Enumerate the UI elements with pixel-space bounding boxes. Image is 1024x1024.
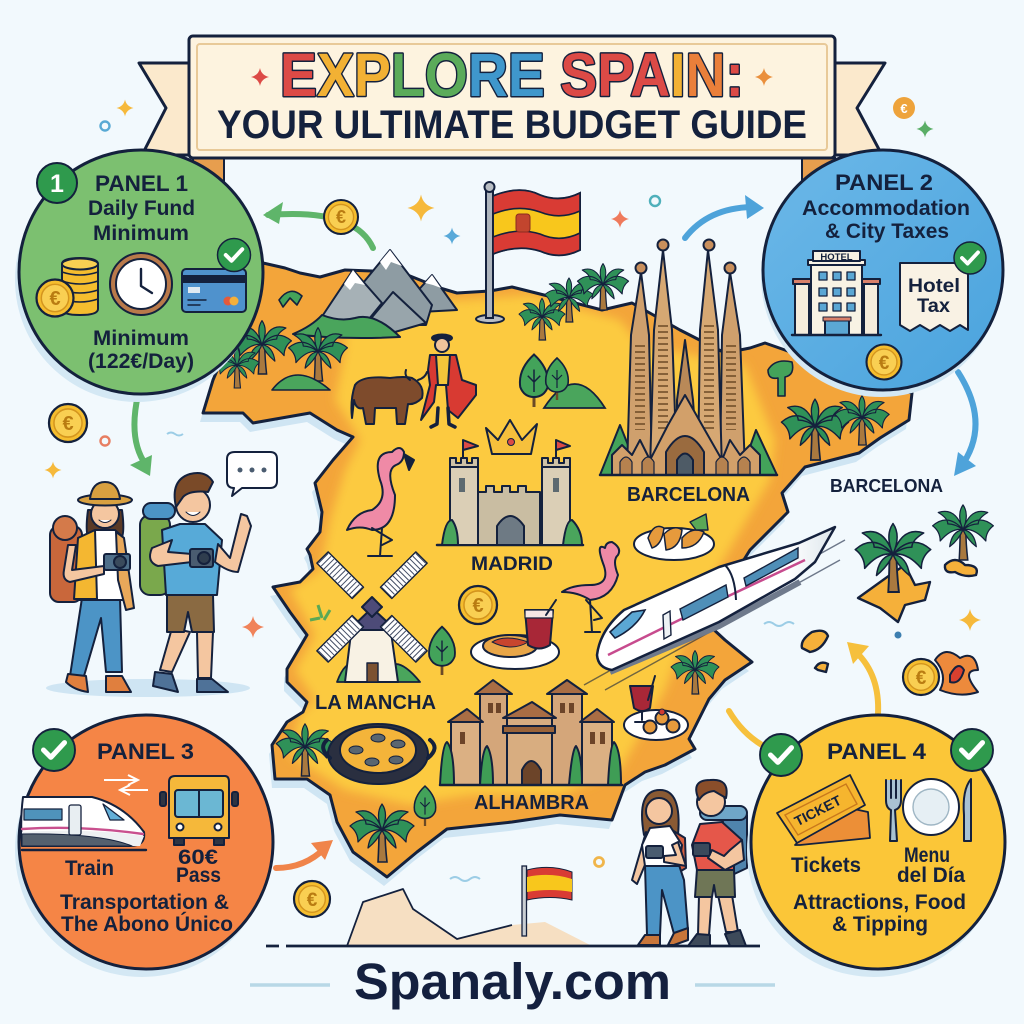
check badge xyxy=(218,238,250,272)
arrow: blue to Barcelona xyxy=(958,372,976,468)
palm 9 xyxy=(671,650,719,694)
panel 4: attractions xyxy=(747,715,1005,977)
coin left: € xyxy=(62,413,74,435)
high speed train xyxy=(584,527,845,690)
coin stack xyxy=(62,258,98,315)
man head xyxy=(697,788,725,816)
travellers left xyxy=(46,473,251,697)
ticket icon: TICKET xyxy=(792,792,844,829)
paella xyxy=(323,724,435,784)
man arm xyxy=(708,840,744,870)
trees and hill xyxy=(414,354,605,826)
coin left xyxy=(49,404,87,442)
man hair xyxy=(696,780,727,800)
man shorts xyxy=(695,869,735,897)
hotel icon: HOTEL xyxy=(820,252,853,263)
sparkle xyxy=(611,210,629,228)
man forearm xyxy=(150,540,192,566)
bull xyxy=(351,370,427,424)
bottom ground xyxy=(266,889,760,946)
arrow: orange to coast xyxy=(276,848,325,868)
hotel tax receipt: Hotel xyxy=(908,276,960,297)
clock xyxy=(110,253,172,315)
man legs xyxy=(698,895,738,935)
panel 1: daily fund xyxy=(15,150,263,402)
banner ribbon tails xyxy=(139,63,885,182)
hotel tax receipt: Tax xyxy=(917,296,950,317)
palm 3 xyxy=(215,347,259,388)
euro coin on map xyxy=(459,586,497,624)
number badge: 1 xyxy=(50,170,64,198)
man torso xyxy=(162,514,251,595)
plate xyxy=(903,779,959,835)
minimum label: Minimum xyxy=(93,327,189,350)
man camera xyxy=(190,549,213,567)
subtitle: Daily Fund xyxy=(88,197,195,220)
sangria glass xyxy=(525,600,556,648)
man shoes xyxy=(688,930,746,946)
woman torso xyxy=(642,826,682,866)
large coin: € xyxy=(49,288,61,310)
man legs xyxy=(153,595,228,692)
coin top xyxy=(324,200,358,234)
palm 4 xyxy=(519,298,565,340)
mountains xyxy=(293,250,457,338)
woman legs xyxy=(66,598,131,692)
arrowhead: green top xyxy=(263,202,283,224)
small flag bottom xyxy=(522,866,572,936)
caption: Transportation & xyxy=(60,891,229,914)
knife xyxy=(964,779,971,841)
crown xyxy=(486,420,537,454)
wave xyxy=(764,622,794,626)
ring xyxy=(594,858,604,866)
banner sparkle left xyxy=(251,68,269,86)
title banner xyxy=(189,36,835,158)
sparkle xyxy=(959,609,981,631)
subtitle 2: Minimum xyxy=(93,222,189,245)
label: La Mancha: LA MANCHA xyxy=(315,692,436,714)
palm 11 xyxy=(350,804,414,862)
heading: PANEL 2 xyxy=(835,170,933,195)
Alhambra xyxy=(440,680,622,785)
palm 7 xyxy=(781,399,849,460)
ring xyxy=(100,436,110,446)
caption: Attractions, Food xyxy=(793,891,966,914)
wave xyxy=(167,432,183,436)
coin top: € xyxy=(336,207,346,227)
ticket icon xyxy=(777,775,870,845)
coin: € xyxy=(879,353,890,374)
tapas plate with sangria xyxy=(624,676,688,740)
arrows icon xyxy=(104,775,148,795)
flamingo right xyxy=(562,542,619,632)
menu label: Menu xyxy=(904,844,950,867)
euro coin on map: € xyxy=(472,595,484,617)
palm 5 xyxy=(545,278,593,322)
coin top right: € xyxy=(900,101,908,116)
title line 1: EXPLORE SPAIN: xyxy=(280,41,744,109)
panel 3: transportation xyxy=(15,715,273,977)
woman pack xyxy=(672,830,686,874)
map of Spain xyxy=(200,263,912,886)
large coin xyxy=(36,280,74,316)
arrowhead: yellow xyxy=(847,642,869,664)
arrowhead: blue top xyxy=(745,195,764,219)
wave xyxy=(450,877,480,881)
arrow: yellow from map xyxy=(729,711,762,745)
windmill xyxy=(317,552,427,682)
sparkle xyxy=(242,616,264,638)
man camera xyxy=(693,843,710,856)
flag of Spain xyxy=(476,182,580,323)
label: Madrid: MADRID xyxy=(471,554,553,575)
island palm xyxy=(855,524,931,592)
sparkle xyxy=(916,120,934,138)
island palm xyxy=(933,505,993,560)
Sagrada Familia xyxy=(600,240,777,475)
check badge xyxy=(954,242,986,274)
subtitle: Accommodation xyxy=(802,197,970,220)
caption 2: The Abono Único xyxy=(61,912,233,936)
Balearic islands xyxy=(802,560,977,672)
woman legs xyxy=(645,865,688,935)
matador xyxy=(421,334,476,427)
subtitle 2: & City Taxes xyxy=(825,220,949,243)
credit card xyxy=(182,269,246,312)
amount: (122€/Day) xyxy=(88,350,194,373)
footer line right xyxy=(695,983,775,987)
panel 2: accommodation xyxy=(761,150,1003,397)
check badge xyxy=(33,729,75,771)
pasta plate xyxy=(471,635,559,669)
sparkle xyxy=(408,194,434,222)
tree xyxy=(414,786,436,826)
woman camera xyxy=(104,554,130,570)
ring xyxy=(100,122,110,130)
woman shoes xyxy=(638,928,688,945)
heading: PANEL 1 xyxy=(95,171,188,196)
woman hair xyxy=(87,510,123,542)
check badge left xyxy=(760,734,802,776)
dot xyxy=(894,632,902,638)
grass tufts xyxy=(310,605,330,620)
coin bottom: € xyxy=(307,890,318,911)
woman torso xyxy=(74,530,134,610)
coin and peppers: € xyxy=(916,668,927,689)
arrow: green down xyxy=(134,395,146,465)
palm 10 xyxy=(276,724,334,776)
palm 8 xyxy=(835,396,889,445)
coin bottom xyxy=(294,881,330,917)
banner sparkle right xyxy=(755,68,773,86)
man backpack xyxy=(140,503,175,595)
hotel icon xyxy=(792,251,881,335)
tree xyxy=(429,627,455,675)
footer brand: Spanaly.com xyxy=(354,953,671,1010)
man head xyxy=(175,473,213,522)
woman camera xyxy=(646,846,663,858)
arrow: blue from sagrada to panel 2 xyxy=(685,207,752,238)
pass label: Pass xyxy=(176,864,221,887)
arrow: yellow up xyxy=(856,652,878,714)
woman hair xyxy=(642,790,679,835)
man pack xyxy=(700,806,747,876)
food plate xyxy=(634,514,714,560)
flamingo left xyxy=(347,448,414,556)
caption 2: & Tipping xyxy=(832,913,928,936)
tree xyxy=(546,358,568,400)
Madrid castle xyxy=(437,440,583,545)
price label: 60€ xyxy=(178,846,218,869)
ring xyxy=(650,196,660,206)
title line 2: YOUR ULTIMATE BUDGET GUIDE xyxy=(217,103,807,147)
small green bushes on map xyxy=(272,291,793,396)
woman arm right xyxy=(664,842,686,866)
del dia label: del Día xyxy=(897,864,965,887)
coin xyxy=(866,344,902,380)
label: Barcelona on map: BARCELONA xyxy=(627,484,750,506)
train label: Train xyxy=(65,857,114,880)
fork xyxy=(886,780,901,841)
tickets label: Tickets xyxy=(791,854,861,877)
sparkle xyxy=(44,462,62,478)
arrowhead: green down xyxy=(130,455,152,476)
palm trees on map xyxy=(215,264,889,862)
coin and peppers xyxy=(903,652,978,695)
sparkle xyxy=(444,228,460,244)
bus icon xyxy=(160,776,238,845)
man torso xyxy=(692,822,742,870)
hotel tax receipt xyxy=(900,263,968,331)
heading: PANEL 3 xyxy=(97,739,194,764)
arrow: green to panel 1 xyxy=(268,214,373,248)
number badge xyxy=(37,163,77,203)
palm 2 xyxy=(289,328,347,381)
woman arm left xyxy=(632,832,652,884)
label: Barcelona outside: BARCELONA xyxy=(830,476,943,496)
woman head xyxy=(646,798,672,824)
arrowhead: orange xyxy=(311,840,333,860)
check badge right xyxy=(951,729,993,771)
woman backpack xyxy=(50,516,82,602)
speech bubble xyxy=(227,452,277,496)
footer line left xyxy=(250,983,330,987)
heading: PANEL 4 xyxy=(827,739,927,764)
arrowhead: blue down xyxy=(954,452,976,476)
palm 6 xyxy=(577,264,629,310)
woman arm xyxy=(64,545,104,582)
coin top right xyxy=(893,97,915,119)
tree xyxy=(520,354,548,407)
label: Alhambra: ALHAMBRA xyxy=(474,792,589,814)
train icon xyxy=(21,797,146,850)
travellers bottom xyxy=(632,780,747,946)
palm 1 xyxy=(233,321,291,374)
sparkle xyxy=(116,100,134,116)
woman head xyxy=(78,482,132,528)
